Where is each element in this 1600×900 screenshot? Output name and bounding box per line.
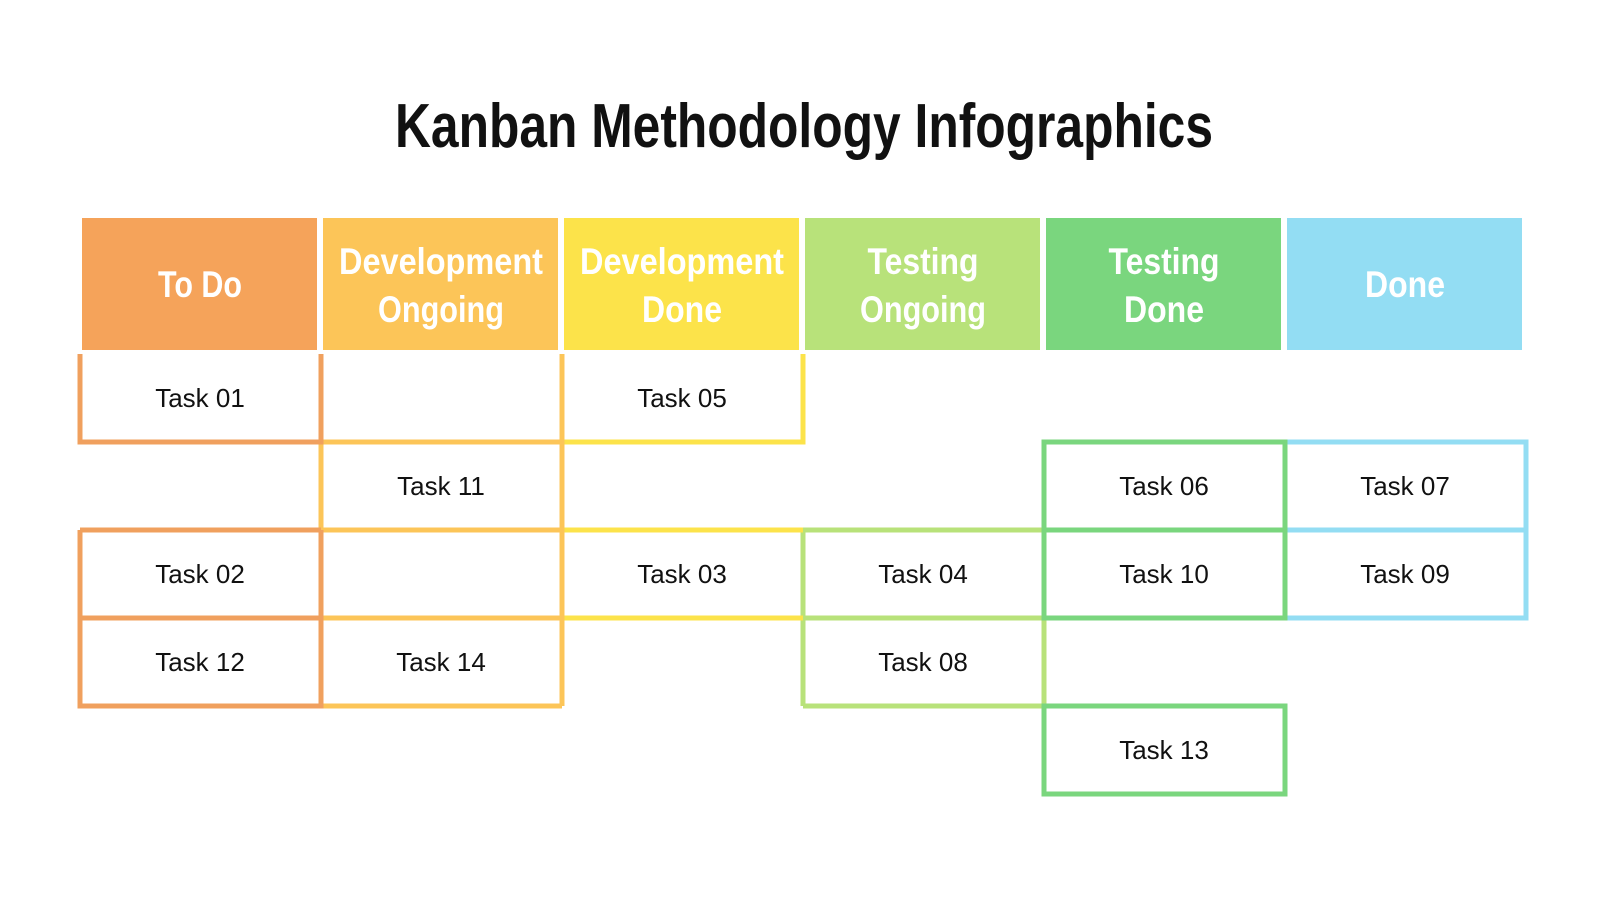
header: Testing Done: Testing [1108,241,1220,282]
header: Development Done: Development [580,241,784,282]
tasks: Task 14 [396,647,486,677]
tasks: Task 11 [397,471,485,501]
grid lines: Done [1285,442,1526,618]
header: Development Done [564,218,799,350]
grid lines: Development Ongoing [321,354,562,706]
title: Kanban Methodology Infographics [395,92,1213,161]
header: Development Ongoing: Ongoing [378,289,504,330]
tasks: Task 10 [1119,559,1209,589]
tasks: Task 03 [637,559,727,589]
header: Testing Ongoing: Testing [868,241,978,282]
header: To Do: To Do [158,264,242,305]
header: Development Ongoing [323,218,558,350]
header: Testing Done: Done [1124,289,1204,330]
tasks: Task 08 [878,647,968,677]
header: Testing Done [1046,218,1281,350]
tasks: Task 09 [1360,559,1450,589]
header: Testing Ongoing [805,218,1040,350]
header: To Do [82,218,317,350]
tasks: Task 02 [155,559,245,589]
tasks: Task 05 [637,383,727,413]
grid lines: To Do [80,354,321,706]
tasks: Task 07 [1360,471,1450,501]
header: Testing Ongoing: Ongoing [860,289,986,330]
tasks: Task 06 [1119,471,1209,501]
tasks: Task 01 [155,383,245,413]
tasks: Task 13 [1119,735,1209,765]
grid lines: Testing Done [1044,442,1285,794]
header: Done: Done [1365,264,1445,305]
tasks [155,383,1450,765]
tasks: Task 04 [878,559,968,589]
tasks: Task 12 [155,647,245,677]
header: Development Ongoing: Development [339,241,543,282]
header: Development Done: Done [642,289,722,330]
grid lines: Development Done [562,354,803,618]
header: Done [1287,218,1522,350]
grid lines: Testing Ongoing [803,530,1044,706]
